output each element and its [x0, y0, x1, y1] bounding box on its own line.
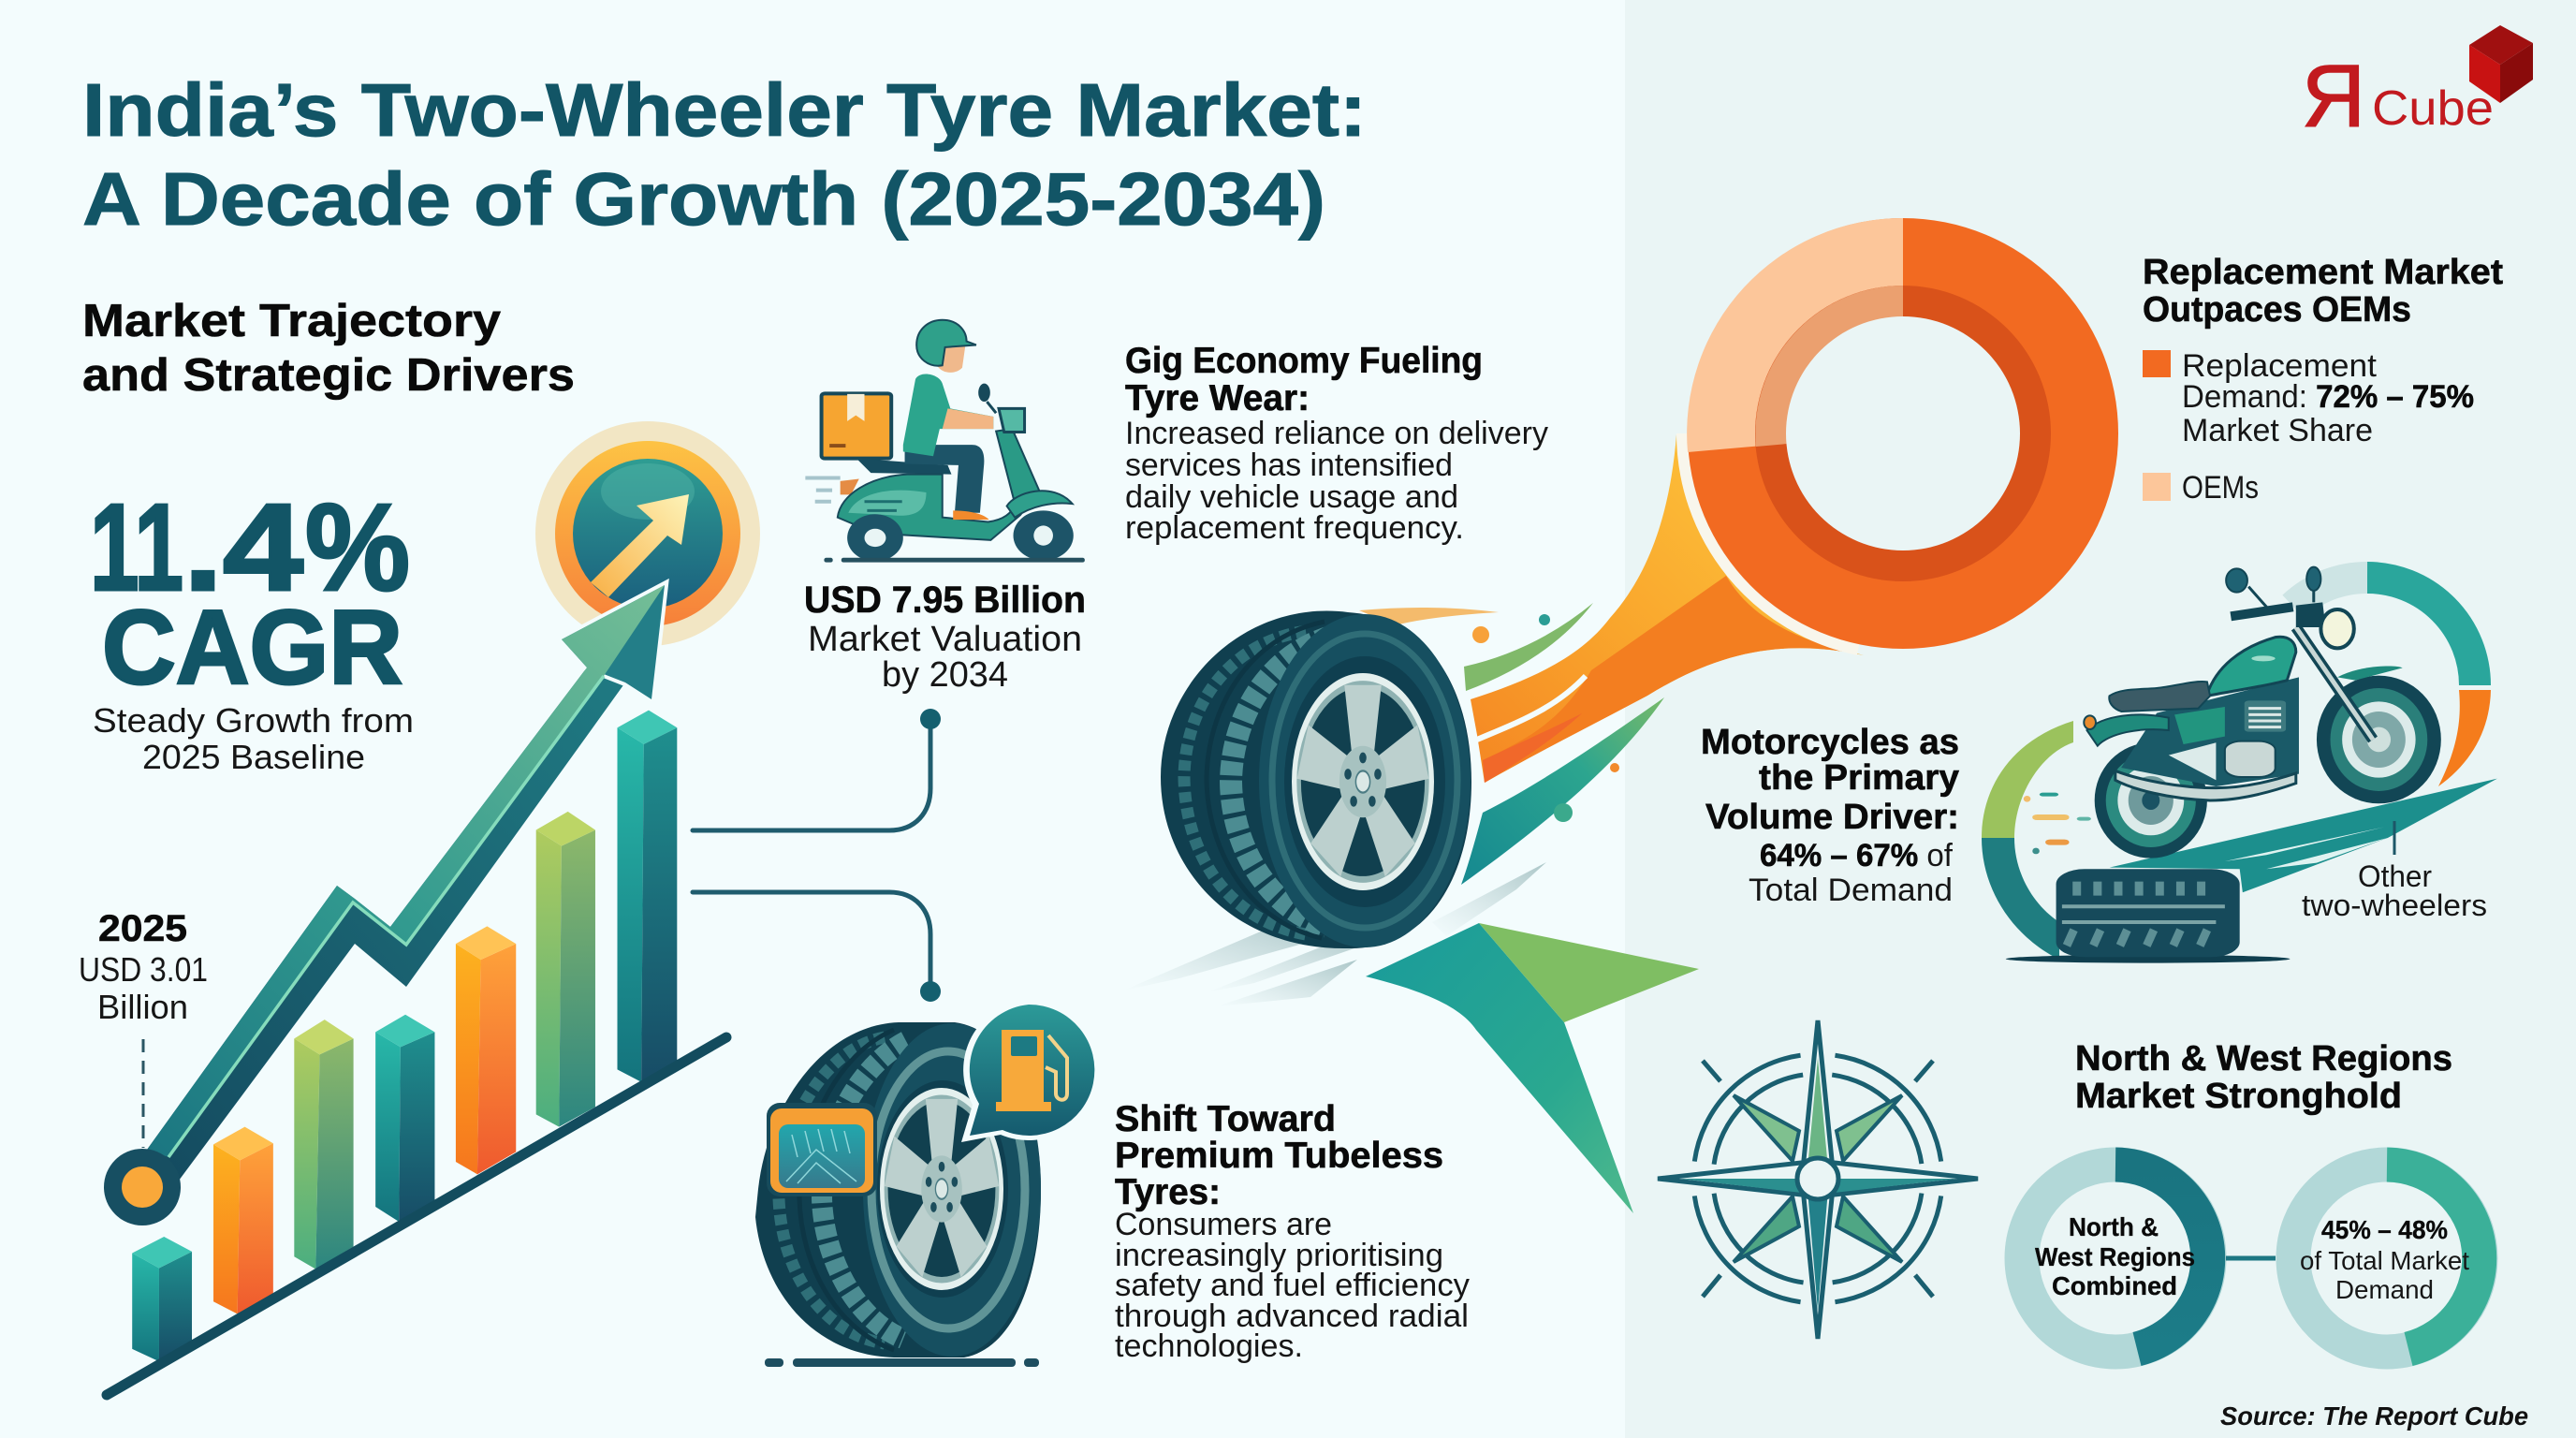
stat: CAGR: 11	[90, 478, 183, 616]
tank	[2207, 637, 2296, 696]
chart: north and west regions ring	[2022, 1165, 2209, 1352]
logo: RCube: Cube	[2372, 81, 2494, 136]
front wheel	[2317, 666, 2441, 803]
chart: rising bars	[132, 711, 677, 1361]
text: motorcycles: the Primary	[1759, 758, 1959, 798]
icon: big teal green arrow	[1366, 923, 1699, 1213]
text: premium tubeless: safety and fuel efficiency	[1115, 1268, 1470, 1303]
text: premium tubeless: Premium Tubeless	[1115, 1136, 1443, 1176]
text and legend: replacement market: OEMs	[2182, 470, 2259, 506]
ground bar	[765, 1358, 1039, 1367]
text and legend: replacement market: Demand: 72% – 75%	[2182, 379, 2474, 415]
text: premium tubeless: Consumers are	[1115, 1207, 1332, 1242]
chart: replacement donut	[1682, 218, 2118, 650]
swoosh: orange streak over tyre	[1359, 608, 1499, 625]
icon: motorcycle on tyre	[2006, 567, 2497, 963]
stat: CAGR: .	[183, 478, 223, 616]
heading: market trajectory	[82, 296, 575, 401]
icon: delivery scooter	[805, 320, 1085, 563]
stat: CAGR: 2025 Baseline	[142, 738, 365, 776]
swoosh: teal ribbon	[1461, 697, 1664, 885]
text: gig economy: replacement frequency.	[1125, 510, 1464, 546]
rear fender	[2086, 714, 2169, 746]
text: premium tubeless: through advanced radial	[1115, 1299, 1469, 1334]
label: other two-wheelers: two-wheelers	[2302, 888, 2487, 922]
tyre shadow streaks	[1123, 862, 1546, 1006]
engine	[2174, 700, 2286, 777]
bar 6	[536, 812, 595, 1127]
source note: Source: The Report Cube	[2220, 1401, 2528, 1431]
stat: CAGR: %	[305, 478, 410, 616]
icon: compass	[1658, 1020, 1978, 1339]
chart: market demand ring	[2293, 1165, 2481, 1352]
arrow: growth trend	[104, 585, 665, 1225]
chart: north and west regions ring: West Regions	[2035, 1242, 2195, 1271]
text and legend: replacement market	[2143, 253, 2503, 506]
text and legend: replacement market: Outpaces OEMs	[2143, 290, 2411, 330]
label: other two-wheelers: Other	[2358, 859, 2432, 893]
bar 3	[294, 1020, 354, 1269]
stat: CAGR: CAGR	[102, 589, 402, 706]
bar 7	[618, 711, 677, 1082]
text and legend: replacement market: Replacement Market	[2143, 253, 2503, 292]
logo: RCube	[2302, 25, 2533, 145]
bar 2	[213, 1127, 273, 1314]
logo: RCube: Я	[2302, 47, 2365, 145]
text: USD 7.95 billion: Market Valuation	[808, 620, 1082, 659]
icon: fuel pump bubble	[961, 1000, 1098, 1142]
chart: market demand ring: Demand	[2335, 1275, 2434, 1304]
text: premium tubeless: technologies.	[1115, 1328, 1303, 1364]
stat: CAGR: 4	[223, 478, 303, 616]
text: gig economy: Tyre Wear:	[1125, 378, 1310, 418]
bar 4	[375, 1015, 434, 1222]
exhaust	[2115, 770, 2296, 800]
text: gig economy: services has intensified	[1125, 448, 1453, 483]
stacked tyre	[2006, 869, 2290, 963]
text: USD 7.95 billion: by 2034	[882, 655, 1008, 695]
connector: to tubeless tyre	[693, 892, 941, 1002]
heading: market trajectory: Market Trajectory	[82, 296, 501, 346]
chart: north and west regions ring: North &	[2069, 1212, 2159, 1241]
bar 5	[456, 926, 516, 1174]
chart: motorcycle share arcs	[1982, 578, 2491, 960]
text: USD 7.95 billion: USD 7.95 Billion	[804, 580, 1086, 621]
text: premium tubeless	[1115, 1099, 1470, 1364]
label: 2025 baseline: USD 3.01	[79, 950, 208, 989]
text and legend: replacement market: Replacement	[2182, 348, 2378, 384]
text: motorcycles: 64% – 67% of	[1760, 838, 1954, 873]
connector: to scooter	[693, 709, 941, 830]
swoosh: orange flow to donut	[1471, 434, 1864, 783]
bar 2025	[132, 1237, 192, 1361]
label: 2025 baseline: Billion	[97, 988, 188, 1026]
headlight and handlebars	[2226, 567, 2354, 648]
text: gig economy: daily vehicle usage and	[1125, 479, 1458, 515]
tyre cutaway	[767, 1103, 877, 1196]
label: 2025 baseline	[79, 908, 208, 1148]
engine backing	[2121, 677, 2299, 786]
swoosh: accent dots	[1472, 614, 1619, 822]
chart: north and west regions ring: Combined	[2052, 1271, 2177, 1300]
swoosh: green ribbon	[1464, 603, 1593, 691]
text: gig economy: Gig Economy Fueling	[1125, 341, 1483, 381]
text: premium tubeless: Shift Toward	[1115, 1099, 1336, 1139]
label: other two-wheelers	[2302, 821, 2487, 922]
icon: tubeless tyre with cutaway	[755, 1022, 1041, 1367]
text: motorcycles	[1701, 723, 1959, 908]
icon: main tyre	[1161, 611, 1471, 948]
heading: north and west: North & West Regions	[2075, 1039, 2452, 1078]
title: A Decade of Growth (2025-2034)	[82, 157, 1325, 241]
ramp	[2110, 779, 2497, 892]
fork and frame	[2296, 627, 2373, 740]
label: 2025 baseline: 2025	[98, 908, 187, 949]
text: USD 7.95 billion	[804, 580, 1086, 695]
heading: market trajectory: and Strategic Drivers	[82, 350, 575, 401]
panel: right side background	[1625, 0, 2576, 1438]
text: premium tubeless: Tyres:	[1115, 1172, 1221, 1212]
background: left area	[0, 0, 1625, 1438]
text: motorcycles: Total Demand	[1749, 873, 1953, 908]
stat: CAGR	[90, 478, 414, 776]
text: gig economy: Increased reliance on delivery	[1125, 416, 1548, 451]
chart: market demand ring: 45% – 48%	[2321, 1215, 2448, 1244]
text: premium tubeless: increasingly prioritising	[1115, 1238, 1443, 1273]
rear wheel	[2095, 742, 2207, 858]
icon: growth medallion	[535, 421, 760, 646]
heading: north and west: Market Stronghold	[2075, 1077, 2402, 1116]
speed bits	[2024, 793, 2091, 854]
text and legend: replacement market: Market Share	[2182, 413, 2373, 448]
text: motorcycles: Motorcycles as	[1701, 723, 1959, 762]
text: motorcycles: Volume Driver:	[1705, 798, 1959, 837]
connector between rings	[2226, 1256, 2276, 1260]
stat: CAGR: Steady Growth from	[93, 701, 414, 740]
title: India’s Two-Wheeler Tyre Market:	[82, 68, 1367, 152]
chart axis	[107, 1037, 726, 1395]
seat	[2109, 682, 2210, 712]
title	[82, 68, 1367, 241]
heading: north and west	[2075, 1039, 2452, 1116]
text: gig economy	[1125, 341, 1548, 546]
chart: market demand ring: of Total Market	[2300, 1246, 2469, 1275]
